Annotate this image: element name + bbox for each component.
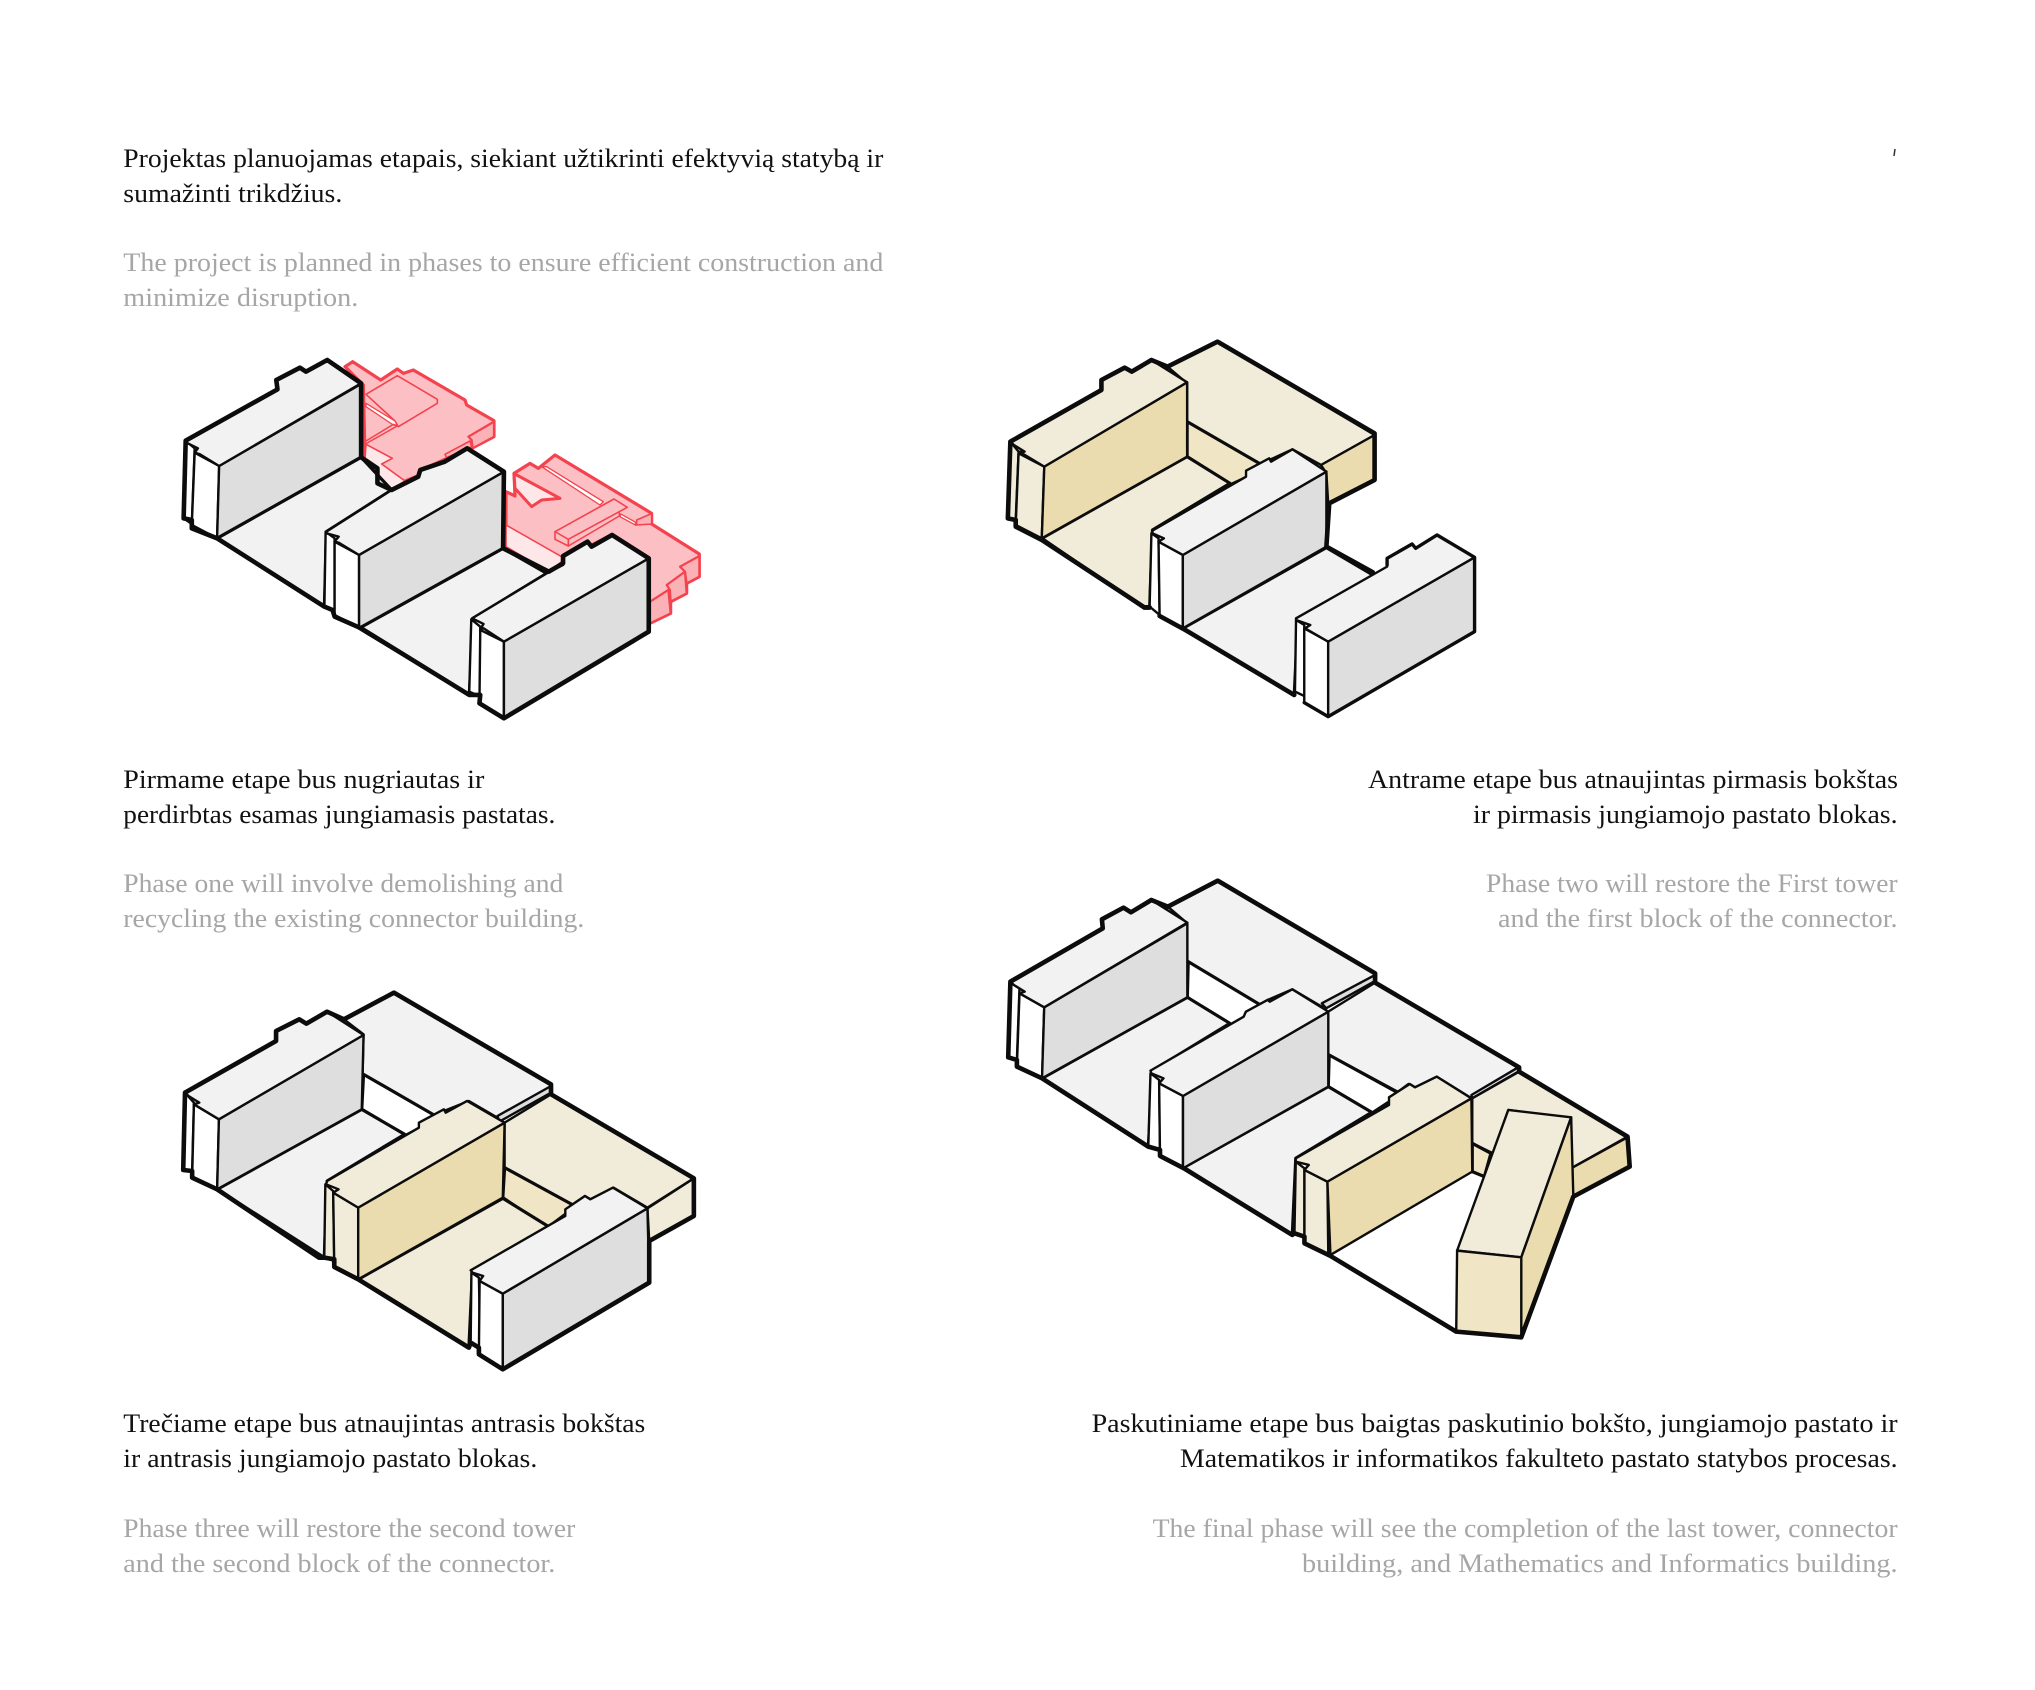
tower three bbox=[469, 535, 649, 718]
rear connector block bbox=[1167, 342, 1375, 503]
outline bbox=[183, 993, 694, 1369]
tower three bbox=[471, 1188, 649, 1369]
phase one caption: Phase one will involve demolishing and bbox=[123, 869, 563, 898]
tower three bbox=[1295, 535, 1475, 717]
diagram: final phase bbox=[1008, 881, 1630, 1337]
tower one bbox=[183, 1012, 364, 1189]
floor one bbox=[1042, 997, 1230, 1147]
intro text block: minimize disruption. bbox=[123, 283, 358, 312]
intro text block bbox=[123, 144, 884, 312]
phase three caption: Trečiame etape bus atnaujintas antrasis bokštas bbox=[123, 1409, 645, 1438]
phase two caption: ir pirmasis jungiamojo pastato blokas. bbox=[1473, 800, 1898, 829]
diagram: phase one bbox=[184, 360, 699, 718]
demolished connector block two (red) bbox=[506, 455, 699, 623]
tower two bbox=[324, 448, 504, 628]
final phase caption: building, and Mathematics and Informatics building. bbox=[1302, 1549, 1898, 1578]
phase one buildings bbox=[184, 360, 649, 718]
floor two bbox=[1184, 1087, 1372, 1235]
phase two caption: and the first block of the connector. bbox=[1498, 904, 1898, 933]
diagram: phase three bbox=[183, 993, 694, 1369]
demolished connector block one (red) bbox=[345, 362, 494, 490]
tower two bbox=[324, 1101, 505, 1279]
phase three caption: ir antrasis jungiamojo pastato blokas. bbox=[123, 1444, 537, 1473]
floor two bbox=[1183, 548, 1375, 695]
floor one bbox=[217, 1109, 405, 1258]
intro text block: The project is planned in phases to ensure efficient construction and bbox=[123, 248, 883, 277]
phase two caption: Antrame etape bus atnaujintas pirmasis bokštas bbox=[1368, 765, 1898, 794]
rear block two bbox=[1328, 983, 1519, 1113]
rear block grey bbox=[344, 993, 551, 1136]
phase one caption: recycling the existing connector building. bbox=[123, 904, 584, 933]
new faculty building bbox=[1456, 1110, 1573, 1337]
tower three bbox=[1294, 1077, 1472, 1255]
final phase caption: The final phase will see the completion of the last tower, connector bbox=[1153, 1514, 1898, 1543]
intro text block: sumažinti trikdžius. bbox=[123, 179, 342, 208]
rear block cream bbox=[503, 1094, 694, 1241]
phase one caption: Pirmame etape bus nugriautas ir bbox=[123, 765, 485, 794]
phase one caption bbox=[123, 765, 584, 933]
tower two bbox=[1148, 989, 1328, 1168]
final phase caption: Paskutiniame etape bus baigtas paskutinio bokšto, jungiamojo pastato ir bbox=[1092, 1409, 1898, 1438]
phase two caption: Phase two will restore the First tower bbox=[1486, 869, 1898, 898]
tower two bbox=[1150, 449, 1326, 628]
final phase caption bbox=[1092, 1409, 1898, 1578]
outline bbox=[184, 360, 649, 718]
phase three caption: and the second block of the connector. bbox=[123, 1549, 555, 1578]
tick mark bbox=[1894, 149, 1895, 156]
floor two bbox=[359, 548, 547, 695]
diagram: phase two bbox=[1008, 342, 1475, 717]
floor two bbox=[358, 1198, 549, 1348]
floor one bbox=[1042, 457, 1230, 608]
outline bbox=[1008, 881, 1630, 1337]
floor one bbox=[217, 457, 392, 607]
phase three caption: Phase three will restore the second tower bbox=[123, 1514, 576, 1543]
phase three caption bbox=[123, 1409, 645, 1578]
intro text block: Projektas planuojamas etapais, siekiant užtikrinti efektyvią statybą ir bbox=[123, 144, 884, 173]
outline bbox=[1008, 342, 1375, 572]
rear block one bbox=[1168, 881, 1375, 1025]
final phase caption: Matematikos ir informatikos fakulteto pastato statybos procesas. bbox=[1180, 1444, 1898, 1473]
phase two caption bbox=[1368, 765, 1898, 933]
tower one bbox=[1008, 360, 1187, 538]
tower one bbox=[184, 360, 361, 538]
rear block three cream bbox=[1472, 1072, 1630, 1197]
phase one caption: perdirbtas esamas jungiamasis pastatas. bbox=[123, 800, 555, 829]
tower one bbox=[1008, 900, 1187, 1078]
